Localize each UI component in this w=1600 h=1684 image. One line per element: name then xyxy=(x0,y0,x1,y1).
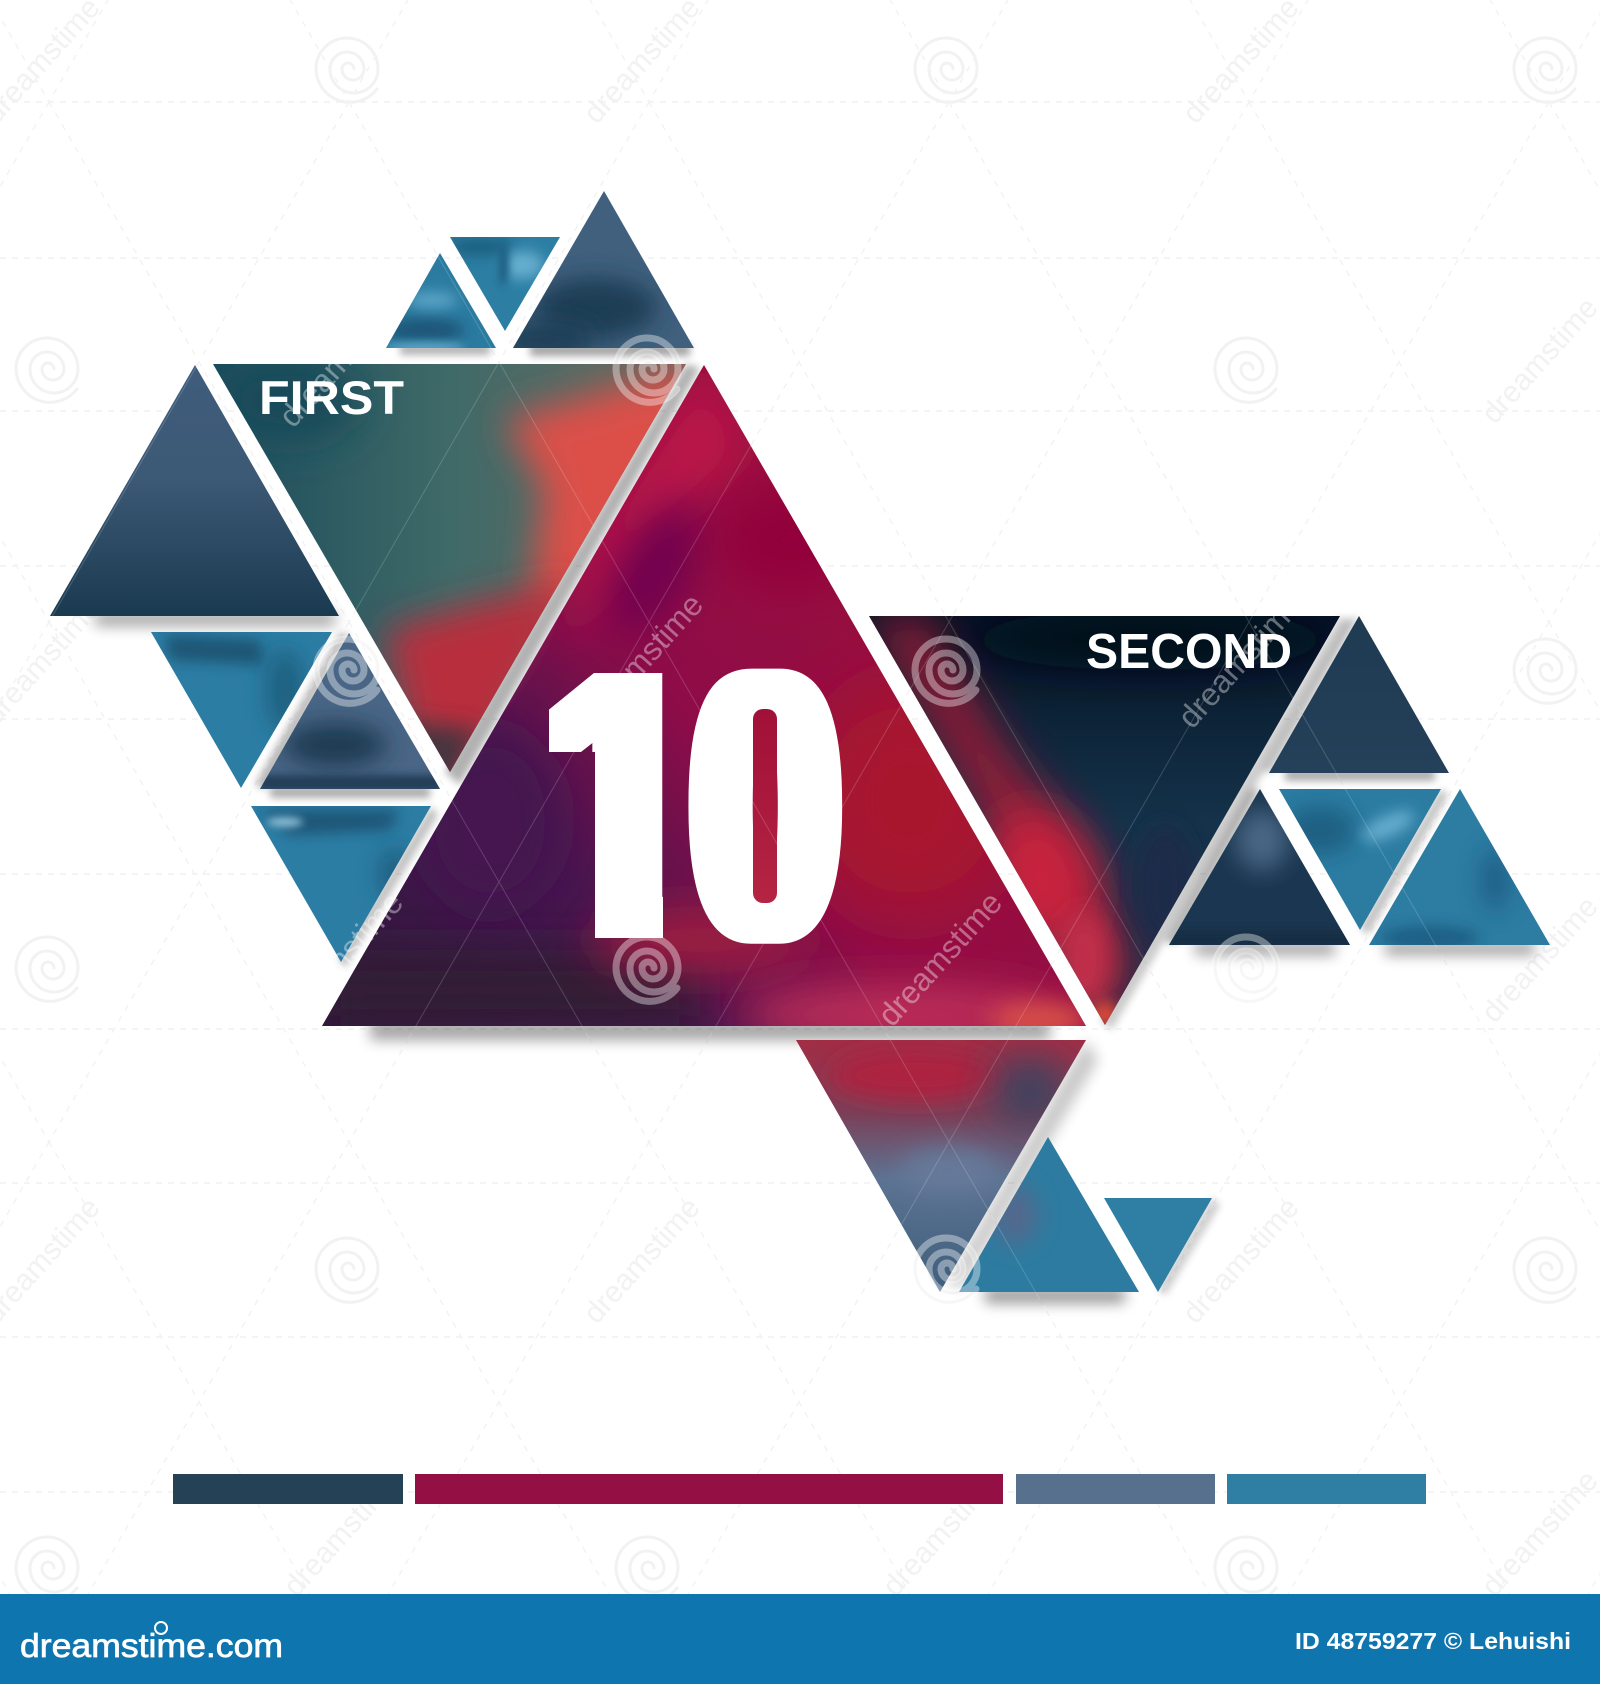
bar: slate xyxy=(1016,1474,1215,1504)
triangle: teal inverted left xyxy=(150,630,335,790)
watermark overlay on shapes: dreamstime xyxy=(871,285,1009,434)
triangle: teal right xyxy=(1365,785,1555,950)
panel: second xyxy=(865,610,1345,1032)
watermark overlay on shapes: dreamstime xyxy=(272,884,410,1033)
number 10 xyxy=(549,668,842,944)
heading: second: SECOND xyxy=(1086,625,1292,679)
triangle: mixed inverted bottom xyxy=(790,1036,1090,1296)
background watermark pattern: dreamstime xyxy=(1176,1191,1306,1330)
panel: first xyxy=(210,360,700,790)
second triangle fill xyxy=(865,610,1345,1032)
triangle: top small teal xyxy=(386,253,496,348)
triangle: large left slate xyxy=(50,365,339,616)
panel: central triangle xyxy=(320,360,1090,1043)
background watermark pattern: dreamstime xyxy=(876,1464,1006,1603)
triangle: dark navy right top xyxy=(1269,616,1449,773)
watermark overlay on shapes: dreamstime xyxy=(572,586,710,735)
triangle: top slate xyxy=(513,191,694,348)
footer credit: ID 48759277 © Lehuishi xyxy=(1295,1628,1571,1654)
bar: teal xyxy=(1227,1474,1426,1504)
triangle: small teal inverted bottom xyxy=(1104,1198,1212,1292)
background watermark pattern: dreamstime xyxy=(577,1191,707,1330)
triangle: slate centre left xyxy=(258,630,443,792)
first triangle fill xyxy=(210,360,700,790)
triangle: teal inverted lower left xyxy=(250,804,435,964)
triangle: teal bottom xyxy=(955,1135,1145,1295)
triangle: teal inverted right xyxy=(1279,789,1441,930)
watermark overlay on shapes: dreamstime xyxy=(871,884,1009,1033)
bar: crimson xyxy=(415,1474,1003,1504)
watermark overlay on shapes: dreamstime xyxy=(1171,586,1309,735)
number 10: 1 xyxy=(535,592,705,1020)
footer logo text: dreamstime.com xyxy=(20,1627,283,1664)
triangle: navy right lower xyxy=(1165,785,1355,950)
heading: first: FIRST xyxy=(259,371,404,424)
footer band xyxy=(0,1594,1600,1684)
bar: navy xyxy=(173,1474,403,1504)
triangle: top small inverted teal xyxy=(450,237,560,331)
footer logo spiral xyxy=(155,1622,167,1634)
central triangle fill xyxy=(320,360,1090,1043)
number 10: 0 xyxy=(692,592,839,1020)
background watermark pattern: dreamstime xyxy=(277,1464,407,1603)
colour bar legend xyxy=(173,1474,1426,1504)
watermark overlay on shapes: dreamstime xyxy=(272,285,410,434)
drop shadows xyxy=(95,344,1535,1303)
